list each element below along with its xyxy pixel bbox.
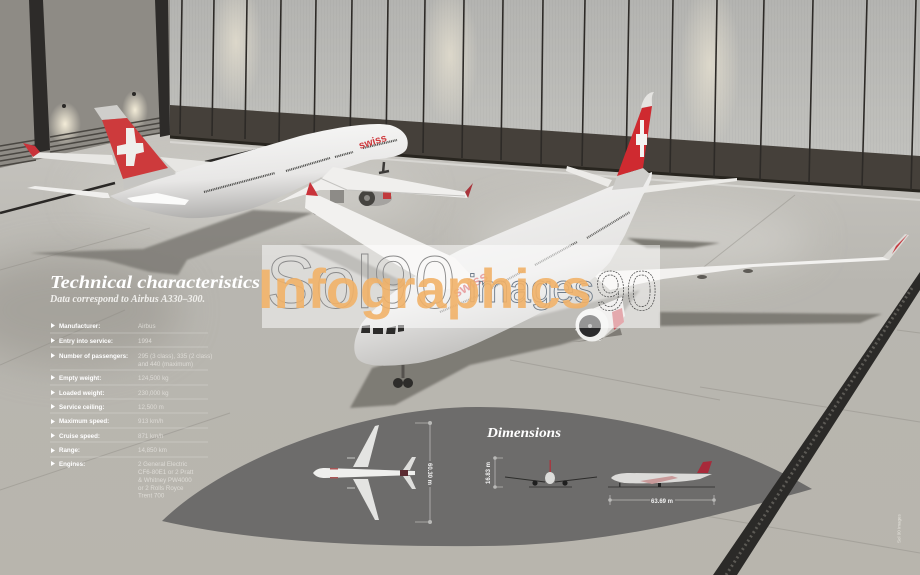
watermark text: Infographics bbox=[258, 258, 592, 320]
row: range bbox=[51, 447, 167, 454]
wall lamps bbox=[49, 90, 148, 146]
near wing bbox=[277, 167, 473, 203]
dimensions panel bbox=[162, 407, 812, 546]
watermark text: 90 bbox=[595, 259, 657, 322]
nose gear bbox=[379, 162, 389, 173]
row: engines bbox=[51, 461, 194, 500]
engine bbox=[330, 190, 392, 206]
watermark text: images bbox=[468, 268, 594, 311]
back plane shadow bbox=[30, 210, 313, 275]
hangar doors bbox=[170, 0, 920, 200]
row: loaded weight bbox=[51, 390, 169, 397]
row: entry into service bbox=[51, 338, 152, 345]
front view plane bbox=[505, 460, 597, 487]
cabin windows bbox=[204, 140, 397, 192]
row: engines: & Whitney PW4000 bbox=[138, 477, 192, 484]
hangar floor bbox=[0, 120, 920, 575]
row: passengers: and 440 (maximum) bbox=[138, 361, 193, 368]
row: service ceiling: 12,500 m bbox=[138, 404, 164, 411]
far stabilizer bbox=[566, 166, 612, 187]
fuselage bbox=[110, 124, 408, 218]
floor grating bbox=[713, 272, 920, 575]
watermark panel bbox=[262, 245, 660, 328]
watermark text: Sol90 bbox=[266, 241, 455, 324]
row: passengers: 295 (3 class), 335 (2 class) bbox=[138, 353, 212, 360]
row: range: Range: bbox=[59, 447, 80, 454]
row: range: 14,850 km bbox=[138, 447, 167, 454]
row: empty weight: Empty weight: bbox=[59, 375, 101, 382]
row: service ceiling: Service ceiling: bbox=[59, 404, 104, 411]
cabin windows bbox=[440, 212, 630, 312]
row: maximum speed: 913 km/h bbox=[138, 418, 164, 425]
length dimension bbox=[608, 495, 716, 505]
row: entry into service: Entry into service: bbox=[59, 338, 113, 345]
tail fin bbox=[612, 92, 654, 190]
row: engines: Engines: bbox=[59, 461, 85, 468]
row: engines: CF6-80E1 or 2 Pratt bbox=[138, 469, 194, 476]
image credit: Sol 90 Images bbox=[896, 513, 902, 543]
main plane shadow bbox=[300, 238, 882, 408]
floor drain strip back bbox=[0, 150, 257, 213]
far wing bbox=[160, 157, 222, 172]
swiss logo: swiss bbox=[450, 268, 491, 301]
engine bbox=[572, 297, 625, 342]
row: loaded weight: 230,000 kg bbox=[138, 390, 169, 397]
row: empty weight: 124,500 kg bbox=[138, 375, 169, 382]
left concrete wall bbox=[0, 0, 170, 168]
length dimension: 63.69 m bbox=[651, 499, 673, 505]
row: maximum speed bbox=[51, 418, 164, 425]
wingspan dimension: 60.30 m bbox=[426, 463, 432, 485]
door spotlights bbox=[210, 0, 740, 150]
row: cruise speed: Cruise speed: bbox=[59, 433, 100, 440]
dimensions heading: Dimensions bbox=[486, 425, 561, 440]
swiss logo: swiss bbox=[357, 132, 388, 152]
left wing bbox=[305, 182, 480, 290]
subtitle: Data correspond to Airbus A330–300. bbox=[49, 294, 205, 305]
far stabilizer bbox=[23, 143, 115, 165]
windshield bbox=[361, 325, 404, 334]
near stabilizer bbox=[643, 178, 737, 193]
row: entry into service: 1994 bbox=[138, 338, 152, 345]
back plane bbox=[23, 105, 473, 218]
main plane bbox=[305, 92, 909, 388]
row: maximum speed: Maximum speed: bbox=[59, 418, 109, 425]
landing gear bbox=[312, 205, 330, 217]
height dimension bbox=[486, 456, 503, 489]
tail fin bbox=[94, 105, 176, 189]
row: engines: 2 General Electric bbox=[138, 461, 187, 468]
right wing bbox=[590, 234, 909, 290]
wingspan dimension bbox=[415, 421, 432, 524]
side view plane bbox=[608, 461, 715, 487]
row: manufacturer bbox=[51, 323, 156, 330]
row: empty weight bbox=[51, 375, 169, 382]
row: service ceiling bbox=[51, 404, 164, 411]
row: passengers bbox=[51, 353, 212, 368]
row: engines: or 2 Rolls Royce bbox=[138, 485, 184, 492]
small tail plane bbox=[127, 193, 189, 205]
row: manufacturer: Manufacturer: bbox=[59, 323, 100, 330]
wall vents bbox=[0, 118, 160, 166]
fuselage bbox=[354, 172, 652, 366]
row: manufacturer: Airbus bbox=[138, 323, 156, 330]
nose gear bbox=[393, 365, 413, 388]
row: cruise speed: 871 km/h bbox=[138, 433, 164, 440]
title: Technical characteristics bbox=[50, 272, 260, 292]
row: passengers: Number of passengers: bbox=[59, 353, 128, 360]
specifications table bbox=[50, 323, 212, 500]
height dimension: 16.83 m bbox=[486, 462, 492, 484]
row: loaded weight: Loaded weight: bbox=[59, 390, 104, 397]
row: cruise speed bbox=[51, 433, 164, 440]
top view plane bbox=[313, 425, 416, 520]
row: engines: Trent 700 bbox=[138, 492, 165, 500]
near stabilizer bbox=[27, 186, 110, 198]
watermark text bbox=[258, 241, 657, 324]
